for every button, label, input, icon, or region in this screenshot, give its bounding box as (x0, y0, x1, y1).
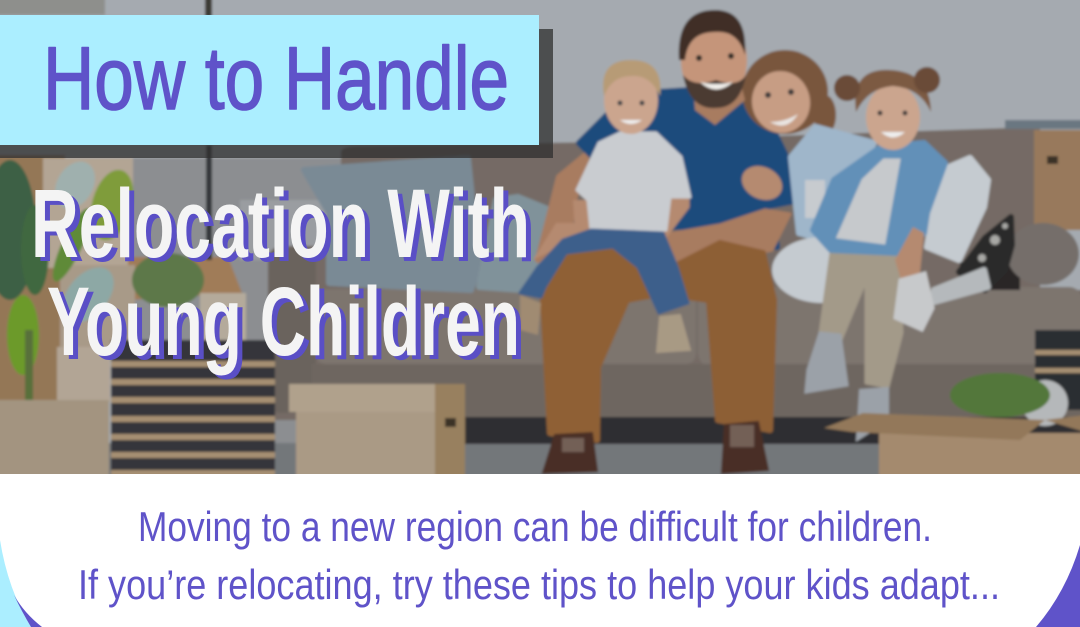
sofa seat cushions (316, 289, 696, 364)
title: Young Children shadow and text (47, 267, 525, 380)
intro text: Moving to a new region can be difficult for children. (138, 503, 932, 550)
girl arm and shoes (895, 227, 924, 283)
sofa base (312, 364, 1080, 417)
girl legs (820, 237, 902, 387)
man shoes (543, 433, 597, 473)
title: Relocation With shadow and text: Relocation With (36, 173, 535, 282)
title: Relocation With shadow and text: Relocation With (31, 169, 530, 278)
sofa back (268, 127, 1080, 420)
man shirt (579, 90, 800, 247)
blue pillows (304, 158, 479, 290)
panel: white intro section (0, 474, 1080, 627)
man trousers (543, 248, 680, 440)
back boxes left (0, 155, 65, 405)
woman white trousers (772, 237, 872, 303)
girl jacket (813, 143, 945, 253)
boy shirt (577, 133, 690, 230)
girl head (866, 84, 920, 150)
cardboard box front (296, 410, 465, 478)
corner: right purple curve (1036, 545, 1080, 627)
floor (0, 443, 1080, 479)
boy arm skin (573, 200, 595, 233)
woman shirt (791, 127, 874, 240)
title: Relocation With shadow and text (31, 169, 535, 282)
panel: title banner (0, 15, 539, 145)
sofa arm (268, 247, 316, 413)
patterned cushion (959, 217, 1012, 290)
boy head (604, 66, 658, 134)
small plant (132, 253, 204, 307)
panel: title banner shadow (0, 29, 553, 158)
boy shoes (657, 315, 690, 352)
corner: left cyan and purple curve (0, 540, 42, 627)
intro text (78, 503, 1000, 608)
dark gap behind cushion (960, 262, 1020, 290)
man beard (683, 75, 746, 108)
open box (879, 433, 1080, 478)
floor lamp (206, 145, 212, 260)
man neck and head (693, 80, 745, 125)
boy jeans (520, 230, 688, 313)
man hair (679, 10, 745, 60)
dark striped box right (1035, 330, 1080, 410)
clock (1022, 380, 1068, 426)
title: How to Handle: How to Handle (43, 28, 509, 128)
title: Young Children shadow and text: Young Children (52, 271, 525, 380)
man forearm (662, 210, 790, 262)
open box plant (950, 373, 1050, 417)
photo: family on sofa among moving boxes (0, 0, 1080, 479)
woman head (746, 66, 816, 138)
man smile (700, 82, 733, 90)
right back box (1034, 130, 1080, 230)
woman hand on man's arm (736, 160, 788, 206)
man arm (538, 153, 588, 260)
striped box (111, 340, 275, 476)
woman hair (742, 50, 828, 134)
roll pillow (1007, 223, 1079, 285)
wall (0, 0, 1080, 445)
title: Young Children shadow and text: Young Children (47, 267, 520, 376)
left plant (0, 154, 141, 400)
cream box left (57, 347, 110, 402)
